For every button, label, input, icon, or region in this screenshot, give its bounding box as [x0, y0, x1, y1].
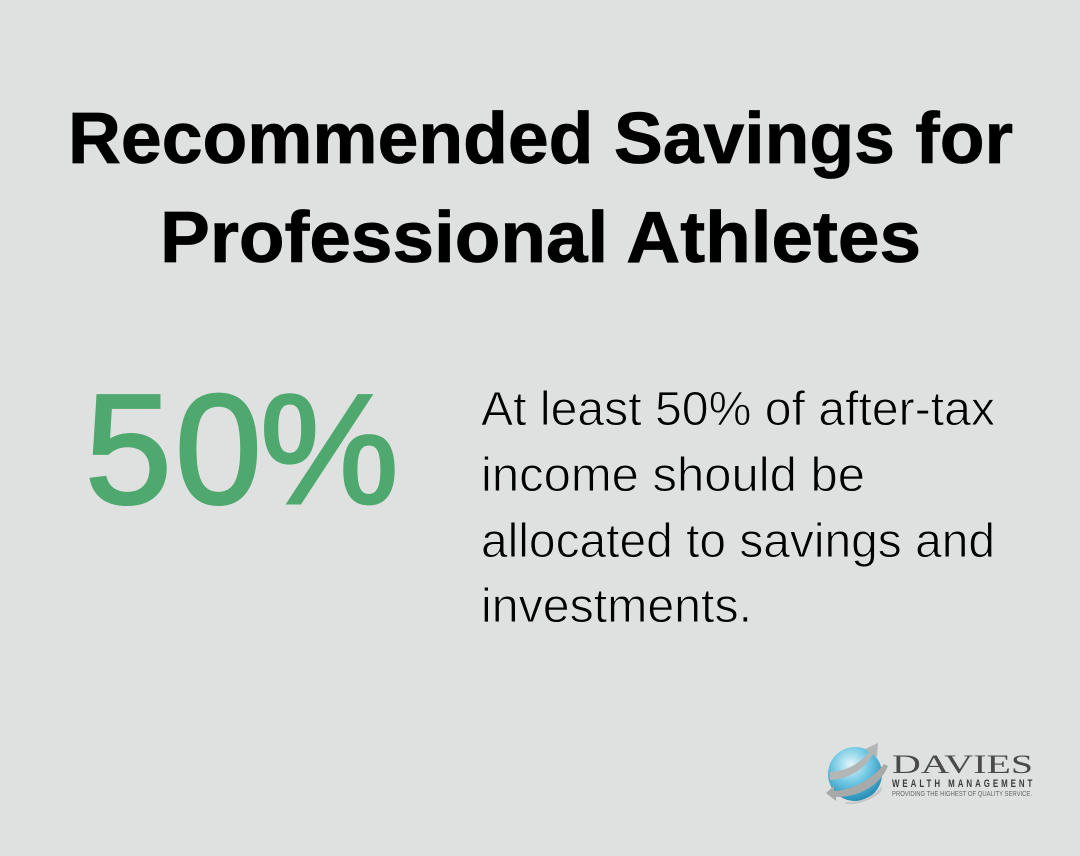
icon: globe with arrows — [826, 743, 888, 804]
title: Professional Athletes — [160, 198, 921, 278]
description text: investments. — [481, 580, 752, 633]
logo subtitle: WEALTH MANAGEMENT — [892, 778, 1033, 790]
description text: allocated to savings and — [481, 515, 995, 568]
logo tagline: PROVIDING THE HIGHEST OF QUALITY SERVICE. — [892, 791, 1032, 798]
logo: Davies Wealth Management — [826, 743, 1033, 804]
description text: At least 50% of after-tax — [481, 383, 995, 436]
title — [68, 99, 1013, 278]
description text: income should be — [481, 449, 865, 502]
description text — [481, 383, 995, 633]
logo wordmark: DAVIES — [892, 750, 1033, 779]
big statistic: 50%: 50% — [85, 363, 399, 537]
title: Recommended Savings for — [68, 99, 1013, 179]
